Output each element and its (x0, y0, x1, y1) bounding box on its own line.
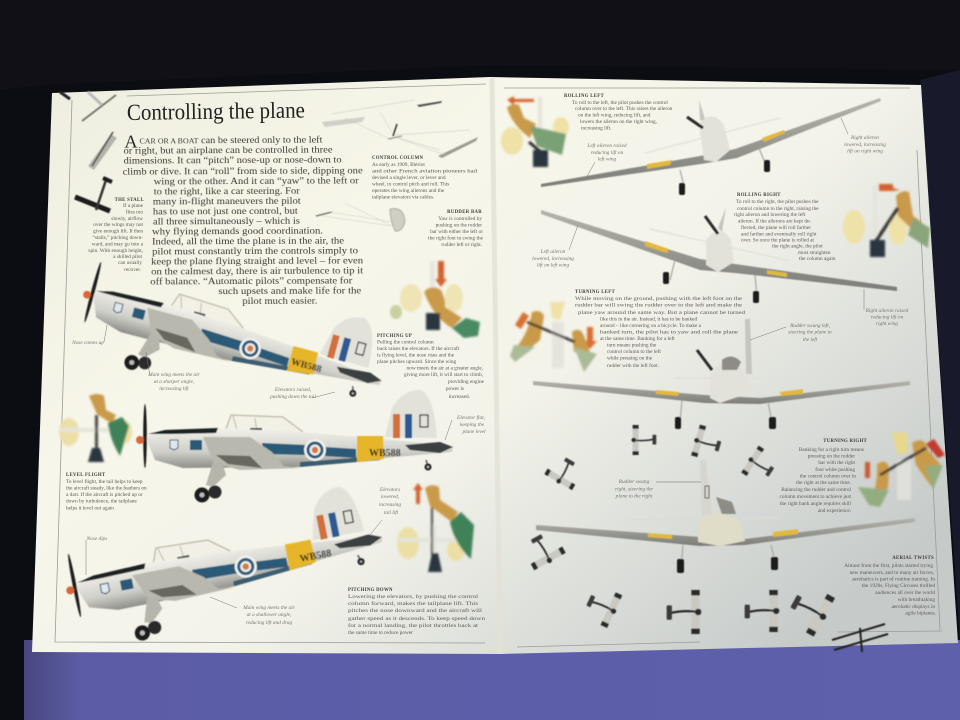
airplane: nose-down side view: WB588 (299, 548, 332, 565)
annotations: rolling right: lowered, increasing (532, 256, 574, 262)
text: level flight: down by turbulence, the tailplane (66, 498, 137, 504)
intro body text: all three simultaneously – which is (153, 216, 300, 226)
annotations: rolling left: Right aileron (850, 135, 879, 141)
text: pitching up: providing engine (448, 379, 485, 385)
illustration: control stick pitching up (390, 261, 480, 338)
annotations: rolling right: right wing (876, 321, 898, 327)
text: control column: wheel, to control pitch and roll. This (372, 182, 449, 188)
text: pitching down: gather speed as it descends. To keep speed down (348, 616, 485, 622)
text: pitching up: giving more lift, it will start to climb, (404, 371, 483, 378)
intro body text: on the calmest day, there is air turbulence to tip it (151, 265, 364, 276)
text: rolling right: the right angle, the pilot (772, 244, 823, 250)
annotations: side-view airplanes: Main wing meets the air (147, 372, 201, 378)
intro body text: many in-flight maneuvers the pilot (153, 196, 301, 206)
annotations: side-view airplanes: Nose dips (86, 536, 107, 542)
intro body text: keep the plane flying straight and level – for even (151, 255, 364, 266)
text: turning right (780, 439, 867, 514)
text: pitching up: power is (446, 386, 464, 392)
intro body text: such upsets and make life for the (218, 285, 361, 296)
text: aerial twists: aerobatics is part of routine training. In (852, 576, 935, 582)
text: rudder bar: the right foot to swing the (428, 234, 484, 242)
annotation: rudder swung right: right, steering the (615, 486, 654, 492)
text: the stall: If a plane (123, 202, 144, 209)
page: open book spread (32, 77, 958, 654)
annotations: rolling right (532, 225, 909, 327)
text: rolling right: must straighten (798, 250, 831, 256)
text: control column: As early as 1909, Blériot (372, 162, 425, 168)
annotations: rolling right: lift on left wing (537, 262, 569, 268)
text: level flight: To level flight, the tail helps to keep (66, 478, 143, 485)
annotations: side-view airplanes: tail lift (384, 509, 399, 516)
text: turning left: TURNING LEFT (575, 290, 615, 295)
airplane: nose-down side view (57, 480, 393, 653)
annotation: rudder swung right (615, 479, 701, 500)
text: control column: operates the wing ailerons and the (372, 188, 445, 194)
text: aerial twists (844, 556, 936, 616)
text: rudder bar: rudder left or right. (441, 241, 482, 248)
text: pitching up: PITCHING UP (377, 334, 412, 339)
text: turning left: rudder bar will swing the rudder over to the left and make the (575, 302, 743, 308)
annotations: side-view airplanes: increasing lift (159, 385, 189, 392)
text: rolling right (734, 193, 836, 262)
annotations: rolling left: lowered, increasing (844, 142, 886, 148)
text: rudder bar: bar with either the left or (430, 228, 483, 235)
text: turning left: control column to the left (607, 348, 661, 355)
annotations: side-view airplanes: Elevators (379, 487, 400, 493)
text: rolling right: right aileron and lowering the left (734, 211, 806, 218)
text: the stall: recover. (124, 267, 141, 273)
text: level flight: LEVEL FLIGHT (66, 473, 106, 478)
annotations: side-view airplanes: Elevator flat, (456, 414, 485, 421)
illustration: control stick level flight (59, 394, 132, 462)
text: rudder bar (428, 210, 484, 248)
airplane: nose-up side view: WB588 (290, 357, 323, 375)
annotation: rudder swung left (750, 322, 832, 343)
annotation: rudder swung left: the left (803, 336, 818, 343)
text: pitching down (348, 588, 485, 636)
text: the stall: can usually (118, 260, 142, 266)
annotation: rudder swung left: steering the plane to (788, 330, 832, 336)
annotations: rolling left: Left aileron raised (586, 142, 627, 149)
text: turning right: Balancing the rudder and control (781, 487, 852, 493)
text: level flight: the aircraft steady, like the feathers on (66, 484, 147, 492)
text: turning right: Banking for a right turn means (799, 446, 864, 453)
text: control column: and other French aviation pioneers had (372, 168, 477, 174)
text: level flight (66, 473, 147, 512)
annotations: rolling left: left wing (598, 156, 617, 162)
annotations: side-view airplanes: Main wing meets the air (242, 605, 296, 611)
text: rolling right: To roll to the right, the pilot pushes the (736, 199, 819, 205)
intro body text: wing or the other. And it can “yaw” to the left or (154, 175, 359, 186)
annotations: side-view airplanes: reducing lift and drag (246, 619, 293, 626)
intro body text: or right, but an airplane can be controlled in three (124, 145, 333, 156)
text: rudder bar: pushing on the rudder (436, 222, 482, 228)
text: pitching up: back raises the elevators. If the aircraft (377, 345, 460, 352)
text: aerial twists: agile biplanes. (905, 610, 936, 616)
text: the stall: ward, and may go into a (92, 242, 144, 248)
text: aerial twists: Almost from the first, pilots started trying (844, 562, 933, 569)
intro body text (122, 130, 364, 307)
text: turning left: around – like cornering on a bicycle. To make a (600, 323, 702, 329)
airplane: front view turning right (536, 460, 915, 573)
airplane: level side view (136, 390, 453, 502)
intro body text: CAR OR A BOAT can be steered only to the left (139, 135, 323, 146)
text: pitching up (377, 334, 485, 400)
sketch: control column glider diagram (322, 100, 478, 158)
intro body text: off balance. “Automatic pilots” compensate for (150, 275, 352, 286)
illustration: control stick rolling right (843, 184, 930, 257)
text: turning right: and experience. (818, 508, 851, 514)
text: rolling right: over. So once the plane is rolled at (741, 238, 814, 244)
annotations: rolling left (585, 118, 886, 180)
annotations: rolling left: lift on right wing (847, 148, 883, 154)
text: pitching up: Pulling the control column (377, 340, 434, 346)
text: level flight: helps it level out again (66, 506, 114, 512)
text: turning right: bar with the right (818, 460, 856, 466)
intro body text: has to use not just one control, but (153, 206, 298, 216)
text: turning left: While moving on the ground, pushing with the left foot on the (575, 295, 743, 302)
airplane: front view rolling right (541, 207, 897, 303)
text: turning right: foot while pushing (815, 466, 855, 473)
text: the stall: over the wings may not (93, 222, 144, 228)
text: aerial twists: new maneuvers, and to many air forces, (850, 569, 934, 576)
annotations: side-view airplanes: increasing (379, 502, 401, 508)
text: pitching up: now meets the air at a greater angle, (407, 366, 483, 372)
annotations: side-view airplanes: Nose comes up (71, 340, 104, 346)
annotations: rolling right: reducing lift on (871, 314, 904, 320)
text: level flight: a dart. If the aircraft is pitched up or (66, 491, 143, 498)
text: the stall: give enough lift. It then (93, 228, 143, 234)
intro body text: pilot must constantly trim the controls simply to (152, 245, 359, 256)
text: pitching up: increased. (449, 394, 470, 400)
intro body text: to the right, like a car steering. For (154, 186, 300, 196)
annotations: side-view airplanes: pushing down the tail (269, 394, 316, 400)
text: the stall: a skilled pilot (113, 254, 143, 260)
annotations: side-view airplanes: Elevators raised, (274, 387, 311, 393)
text: control column (372, 156, 477, 200)
annotation: rudder swung right: plane to the right (615, 494, 653, 500)
text: the stall: slowly, airflow (111, 215, 143, 222)
annotations: rolling left: reducing lift on (591, 149, 624, 156)
illustration: rudder pedals turning left (510, 302, 597, 372)
text: pitching down: PITCHING DOWN (348, 588, 393, 593)
annotations: side-view airplanes: lowered, (381, 494, 399, 500)
text: rolling left: on the left wing, reducing lift, and (578, 112, 651, 118)
text: pitching down: the same time to reduce power (348, 630, 413, 636)
text: pitching up: is flying level, the nose rises and the (377, 352, 455, 358)
text: rudder bar: RUDDER BAR (447, 210, 482, 215)
text: the stall: spin. With enough height, (88, 248, 143, 254)
text: the stall: “stalls,” pitching down- (93, 234, 143, 241)
text: turning left: banked turn, the pilot has to yaw and roll the plane (600, 330, 739, 336)
text: turning left: turn means pushing the (607, 342, 657, 348)
annotations: side-view airplanes (71, 325, 486, 626)
text: aerial twists: AERIAL TWISTS (892, 556, 934, 561)
intro body text: why flying demands good coordination. (152, 226, 323, 236)
intro body text: Indeed, all the time the plane is in the air, the (152, 235, 344, 246)
text: turning left: rudder with the left foot. (607, 362, 659, 369)
text: rolling left: increasing lift. (581, 124, 612, 132)
text: control column: devised a single lever, or lever and (372, 175, 446, 181)
text: rolling right: and farther and eventually roll right (741, 230, 817, 238)
text: aerial twists: the 1920s, Flying Circuses thrilled (862, 583, 935, 589)
illustration: rudder pedals turning right (858, 432, 945, 507)
text: pitching down: Lowering the elevators, by pushing the control (348, 594, 479, 600)
annotation: rudder swung left: Rudder swung left, (789, 322, 830, 329)
illustration: control stick pitching down (397, 483, 474, 572)
text: turning left (575, 290, 745, 369)
text: rolling left: lowers the aileron on the right wing, (580, 119, 657, 125)
text: rudder bar: Yaw is controlled by (438, 216, 482, 222)
text: turning left: like this in the air. Instead, it has to be banked (600, 316, 697, 322)
text: turning right: TURNING RIGHT (823, 439, 867, 444)
text: the stall (88, 198, 144, 273)
annotations: rolling right: Right aileron raised (865, 308, 909, 314)
text: the stall: THE STALL (115, 198, 144, 203)
text: pitching down: for a normal landing, the pilot throttles back at (348, 622, 479, 629)
text: rolling right: the column again (799, 256, 836, 262)
text: rolling right: ROLLING RIGHT (737, 193, 781, 198)
intro body text: pilot much easier. (242, 296, 317, 306)
icons: sequence of aerobatic biplanes (520, 424, 888, 652)
airplane: level side view: WB588 (369, 448, 401, 459)
text: aerial twists: with breathtaking (898, 597, 935, 603)
annotations: side-view airplanes: at a sharper angle, (154, 379, 194, 385)
text: turning right: the control column over to (800, 474, 856, 480)
text: aerial twists: aerobatic displays in (891, 604, 935, 610)
title: Controlling the plane (127, 98, 305, 125)
text: turning right: the right bank angle requires skill (780, 501, 852, 507)
text: rolling left (564, 94, 673, 132)
annotations: side-view airplanes: at a shallower angle, (247, 612, 291, 618)
text: turning left: at the same time. Banking for a left (600, 335, 675, 342)
intro body text: A (124, 132, 138, 152)
text: rolling right: aileron. If the ailerons are kept de- (738, 218, 811, 224)
airplane: front view turning left (533, 319, 910, 429)
text: aerial twists: audiences all over the world (875, 590, 935, 596)
annotations: side-view airplanes: keeping the (460, 422, 485, 428)
text: turning right: pressing on the rudder (808, 454, 855, 460)
airplane: front view rolling left (541, 98, 881, 195)
text: rolling left: To roll to the left, the pilot pushes the control (572, 99, 668, 106)
text: pitching down: column forward, makes the tailplane lift. This (348, 600, 478, 607)
text: control column: CONTROL COLUMN (372, 156, 423, 161)
text: turning right: column movement to achieve just (780, 494, 852, 500)
illustration: control stick rolling left (501, 96, 569, 167)
text: turning left: while pressing on the (607, 356, 653, 362)
intro body text: dimensions. It can “pitch” nose-up or nose-down to (124, 154, 342, 166)
text: rolling left: ROLLING LEFT (564, 94, 604, 99)
text: rolling right: flected, the plane will roll farther (741, 224, 811, 231)
airplane: nose-up side view (67, 246, 396, 433)
text: the stall: flies too (126, 208, 143, 216)
annotations: rolling right: Left aileron (540, 248, 566, 255)
text: pitching up: plane pitches upward. Since the wing (377, 359, 456, 365)
text: rolling right: control column to the right, raising the (737, 206, 819, 212)
text: pitching down: pitches the nose downward and the aircraft will (348, 607, 483, 614)
text: turning left: plane yaw around the same way. But a plane cannot be turned (578, 310, 745, 316)
icons: stalling biplanes at top left (60, 92, 116, 211)
annotation: rudder swung right: Rudder swung (618, 479, 650, 485)
text: turning right: the right at the same time. (796, 480, 851, 486)
text: rolling left: column over to the left. This raises the aileron (575, 105, 673, 112)
annotations: side-view airplanes: plane level (461, 429, 486, 435)
sketch: rudder bar diagram (316, 203, 405, 231)
intro body text: climb or dive. It can “roll” from side to side, dipping one (123, 165, 363, 177)
text: control column: tailplane elevators via cables. (372, 194, 434, 200)
